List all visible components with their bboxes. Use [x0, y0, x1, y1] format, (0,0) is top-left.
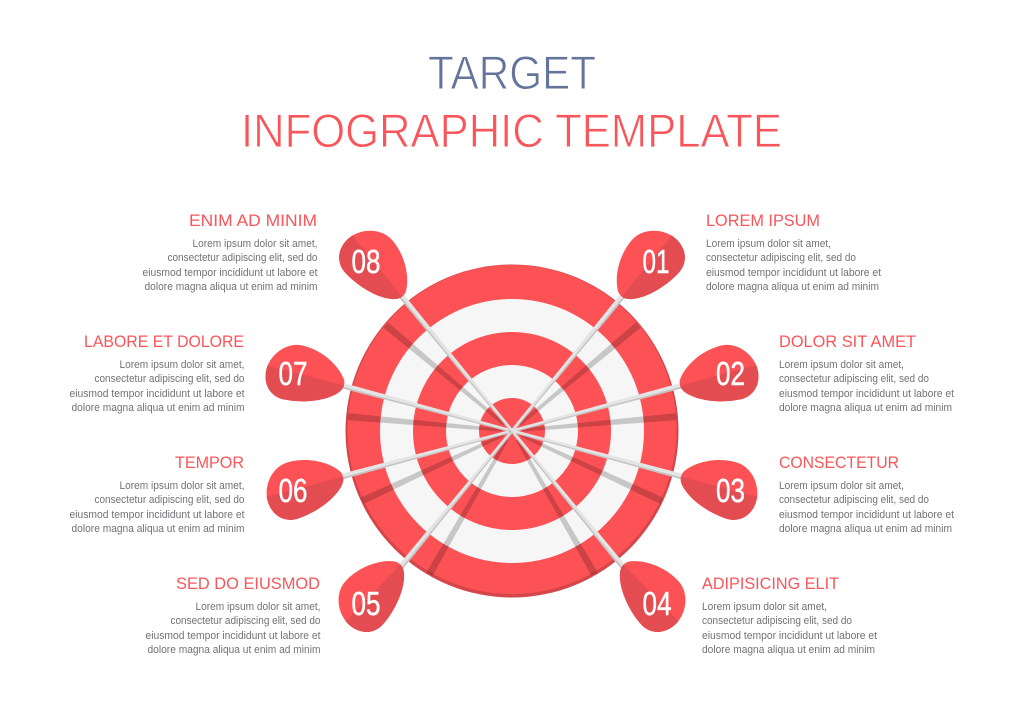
- text block 05: sed do eiusmod: [146, 574, 320, 656]
- dart 04: [603, 545, 699, 642]
- text block 01: lorem ipsum: dolore magna aliqua ut enim ad minim: [706, 281, 879, 293]
- text block 06: tempor: consectetur adipiscing elit, sed do: [94, 494, 244, 506]
- dart 01: [600, 218, 694, 315]
- text block 01: lorem ipsum: [706, 211, 881, 293]
- text block 08: enim ad minim: [142, 211, 318, 293]
- text block 04: adipisicing elit: consectetur adipiscing elit, sed do: [702, 615, 852, 627]
- text block 07: labore et dolore: Lorem ipsum dolor sit amet,: [120, 359, 244, 371]
- dart 06: [259, 449, 350, 525]
- text block 04: adipisicing elit: [702, 574, 877, 656]
- text block 08: enim ad minim: ENIM AD MINIM: [189, 211, 317, 230]
- text block 03: consectetur: Lorem ipsum dolor sit amet,: [779, 480, 904, 492]
- dart 08: 08: [352, 243, 380, 280]
- dart 07: 07: [278, 355, 308, 392]
- text block 05: sed do eiusmod: SED DO EIUSMOD: [176, 574, 320, 593]
- dart 02: [673, 338, 764, 414]
- text block 01: lorem ipsum: eiusmod tempor incididunt ut labore et: [706, 267, 881, 279]
- text block 06: tempor: [70, 453, 244, 535]
- title line: target: TARGET: [428, 46, 596, 99]
- text block 04: adipisicing elit: dolore magna aliqua ut enim ad minim: [702, 644, 875, 656]
- text block 06: tempor: TEMPOR: [175, 453, 244, 472]
- dart 03: [674, 449, 765, 525]
- text block 02: dolor sit amet: consectetur adipiscing elit, sed do: [779, 373, 929, 385]
- text block 07: labore et dolore: LABORE ET DOLORE: [84, 332, 244, 351]
- text block 01: lorem ipsum: LOREM IPSUM: [706, 211, 820, 230]
- target board: [346, 264, 678, 598]
- text block 03: consectetur: [779, 453, 954, 535]
- text block 08: enim ad minim: eiusmod tempor incididunt ut labore et: [142, 267, 318, 279]
- dart 03: 03: [716, 472, 745, 509]
- dart shadows on the board: [347, 322, 677, 576]
- text block 07: labore et dolore: eiusmod tempor incididunt ut labore et: [70, 388, 244, 400]
- dart 07: [260, 338, 351, 414]
- text block 04: adipisicing elit: Lorem ipsum dolor sit amet,: [702, 601, 827, 613]
- text block 01: lorem ipsum: Lorem ipsum dolor sit amet,: [706, 238, 831, 250]
- text block 03: consectetur: CONSECTETUR: [779, 453, 899, 472]
- text block 03: consectetur: eiusmod tempor incididunt ut labore et: [779, 509, 954, 521]
- text block 02: dolor sit amet: dolore magna aliqua ut enim ad minim: [779, 402, 952, 414]
- text block 01: lorem ipsum: consectetur adipiscing elit, sed do: [706, 252, 856, 264]
- text block 06: tempor: Lorem ipsum dolor sit amet,: [120, 480, 244, 492]
- dart 05: [325, 545, 421, 642]
- text block 04: adipisicing elit: ADIPISICING ELIT: [702, 574, 839, 593]
- text block 02: dolor sit amet: eiusmod tempor incididunt ut labore et: [779, 388, 954, 400]
- title line: infographic template: INFOGRAPHIC TEMPLATE: [241, 104, 782, 157]
- dart 04: 04: [642, 585, 672, 622]
- text block 07: labore et dolore: [70, 332, 244, 414]
- dart 06: 06: [278, 472, 308, 509]
- text block 08: enim ad minim: Lorem ipsum dolor sit amet,: [192, 238, 318, 250]
- text block 05: sed do eiusmod: eiusmod tempor incididunt ut labore et: [146, 630, 320, 642]
- text block 02: dolor sit amet: Lorem ipsum dolor sit amet,: [779, 359, 904, 371]
- text block 07: labore et dolore: dolore magna aliqua ut enim ad minim: [72, 402, 244, 414]
- text block 03: consectetur: consectetur adipiscing elit, sed do: [779, 494, 929, 506]
- text block 08: enim ad minim: consectetur adipiscing elit, sed do: [168, 252, 318, 264]
- text block 07: labore et dolore: consectetur adipiscing elit, sed do: [94, 373, 244, 385]
- text block 05: sed do eiusmod: Lorem ipsum dolor sit amet,: [196, 601, 320, 613]
- text block 05: sed do eiusmod: consectetur adipiscing elit, sed do: [170, 615, 320, 627]
- text block 02: dolor sit amet: [779, 332, 954, 414]
- dart shafts: [341, 294, 683, 568]
- text block 08: enim ad minim: dolore magna aliqua ut enim ad minim: [144, 281, 318, 293]
- text block 02: dolor sit amet: DOLOR SIT AMET: [779, 332, 916, 351]
- text block 03: consectetur: dolore magna aliqua ut enim ad minim: [779, 523, 952, 535]
- dart 01: 01: [642, 243, 670, 280]
- text block 06: tempor: dolore magna aliqua ut enim ad minim: [72, 523, 244, 535]
- text block 04: adipisicing elit: eiusmod tempor incididunt ut labore et: [702, 630, 877, 642]
- dart 08: [330, 218, 424, 315]
- dart 02: 02: [716, 355, 745, 392]
- text block 06: tempor: eiusmod tempor incididunt ut labore et: [70, 509, 244, 521]
- dart 05: 05: [352, 585, 380, 622]
- title: [241, 46, 782, 157]
- text block 05: sed do eiusmod: dolore magna aliqua ut enim ad minim: [148, 644, 320, 656]
